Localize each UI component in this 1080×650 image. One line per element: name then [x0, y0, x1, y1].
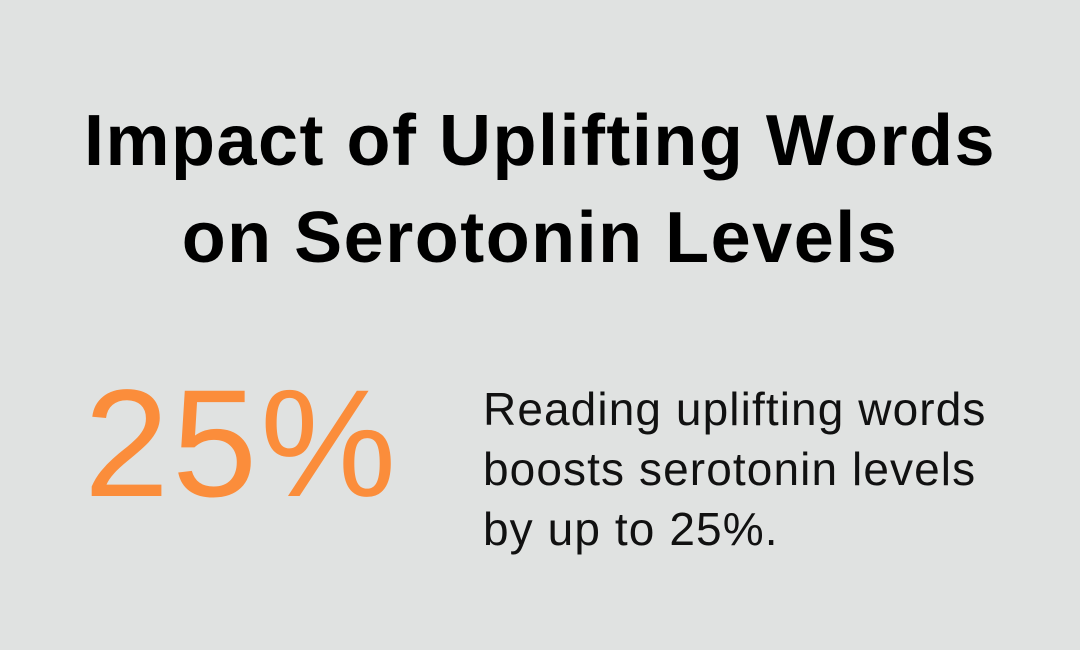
big stat number: 25% [84, 358, 399, 529]
description text [483, 383, 986, 555]
title: Impact of Uplifting Words [84, 101, 996, 181]
description text: Reading uplifting words [483, 383, 986, 435]
description text: boosts serotonin levels [483, 443, 976, 495]
description text: by up to 25%. [483, 503, 779, 555]
title: on Serotonin Levels [182, 198, 898, 278]
title [84, 101, 996, 278]
